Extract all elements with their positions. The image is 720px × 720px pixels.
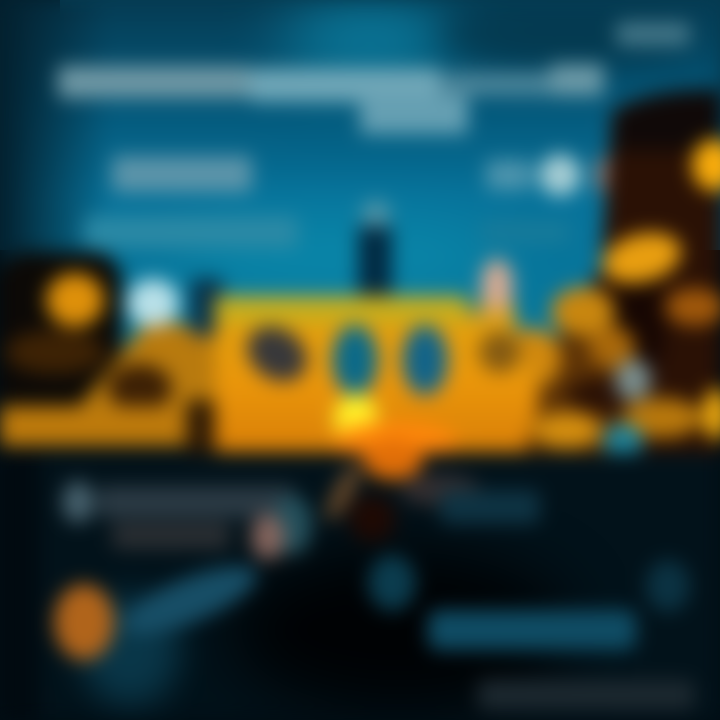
sub caption: right (480, 220, 570, 244)
light glow: orange core (333, 422, 457, 462)
title (58, 64, 604, 134)
central yellow ship or building (215, 296, 540, 462)
right building: dark mass with lights (505, 90, 720, 459)
sub caption: left (84, 216, 298, 248)
lower right text block (368, 490, 690, 612)
background: night sky (0, 0, 720, 360)
silhouette: tower figure (358, 200, 392, 304)
window: right (479, 331, 521, 373)
lower left text block (62, 481, 312, 560)
left statistic (112, 156, 252, 192)
window: centre-left (332, 325, 378, 395)
left building: dark mass with lights (0, 252, 224, 455)
window: centre-right (402, 325, 448, 395)
icon: orange circle (54, 584, 114, 660)
lower dark panel (0, 453, 720, 720)
light glow: centre (334, 394, 378, 446)
window: left (236, 315, 318, 393)
orange reflection below the centre (320, 440, 480, 542)
teal swoosh, left (80, 553, 265, 706)
right statistic (486, 154, 646, 196)
pale chimney at right of centre (476, 259, 517, 325)
teal bar, lower right (428, 610, 636, 650)
footer text smear (478, 680, 694, 710)
header label, top right (616, 22, 690, 46)
